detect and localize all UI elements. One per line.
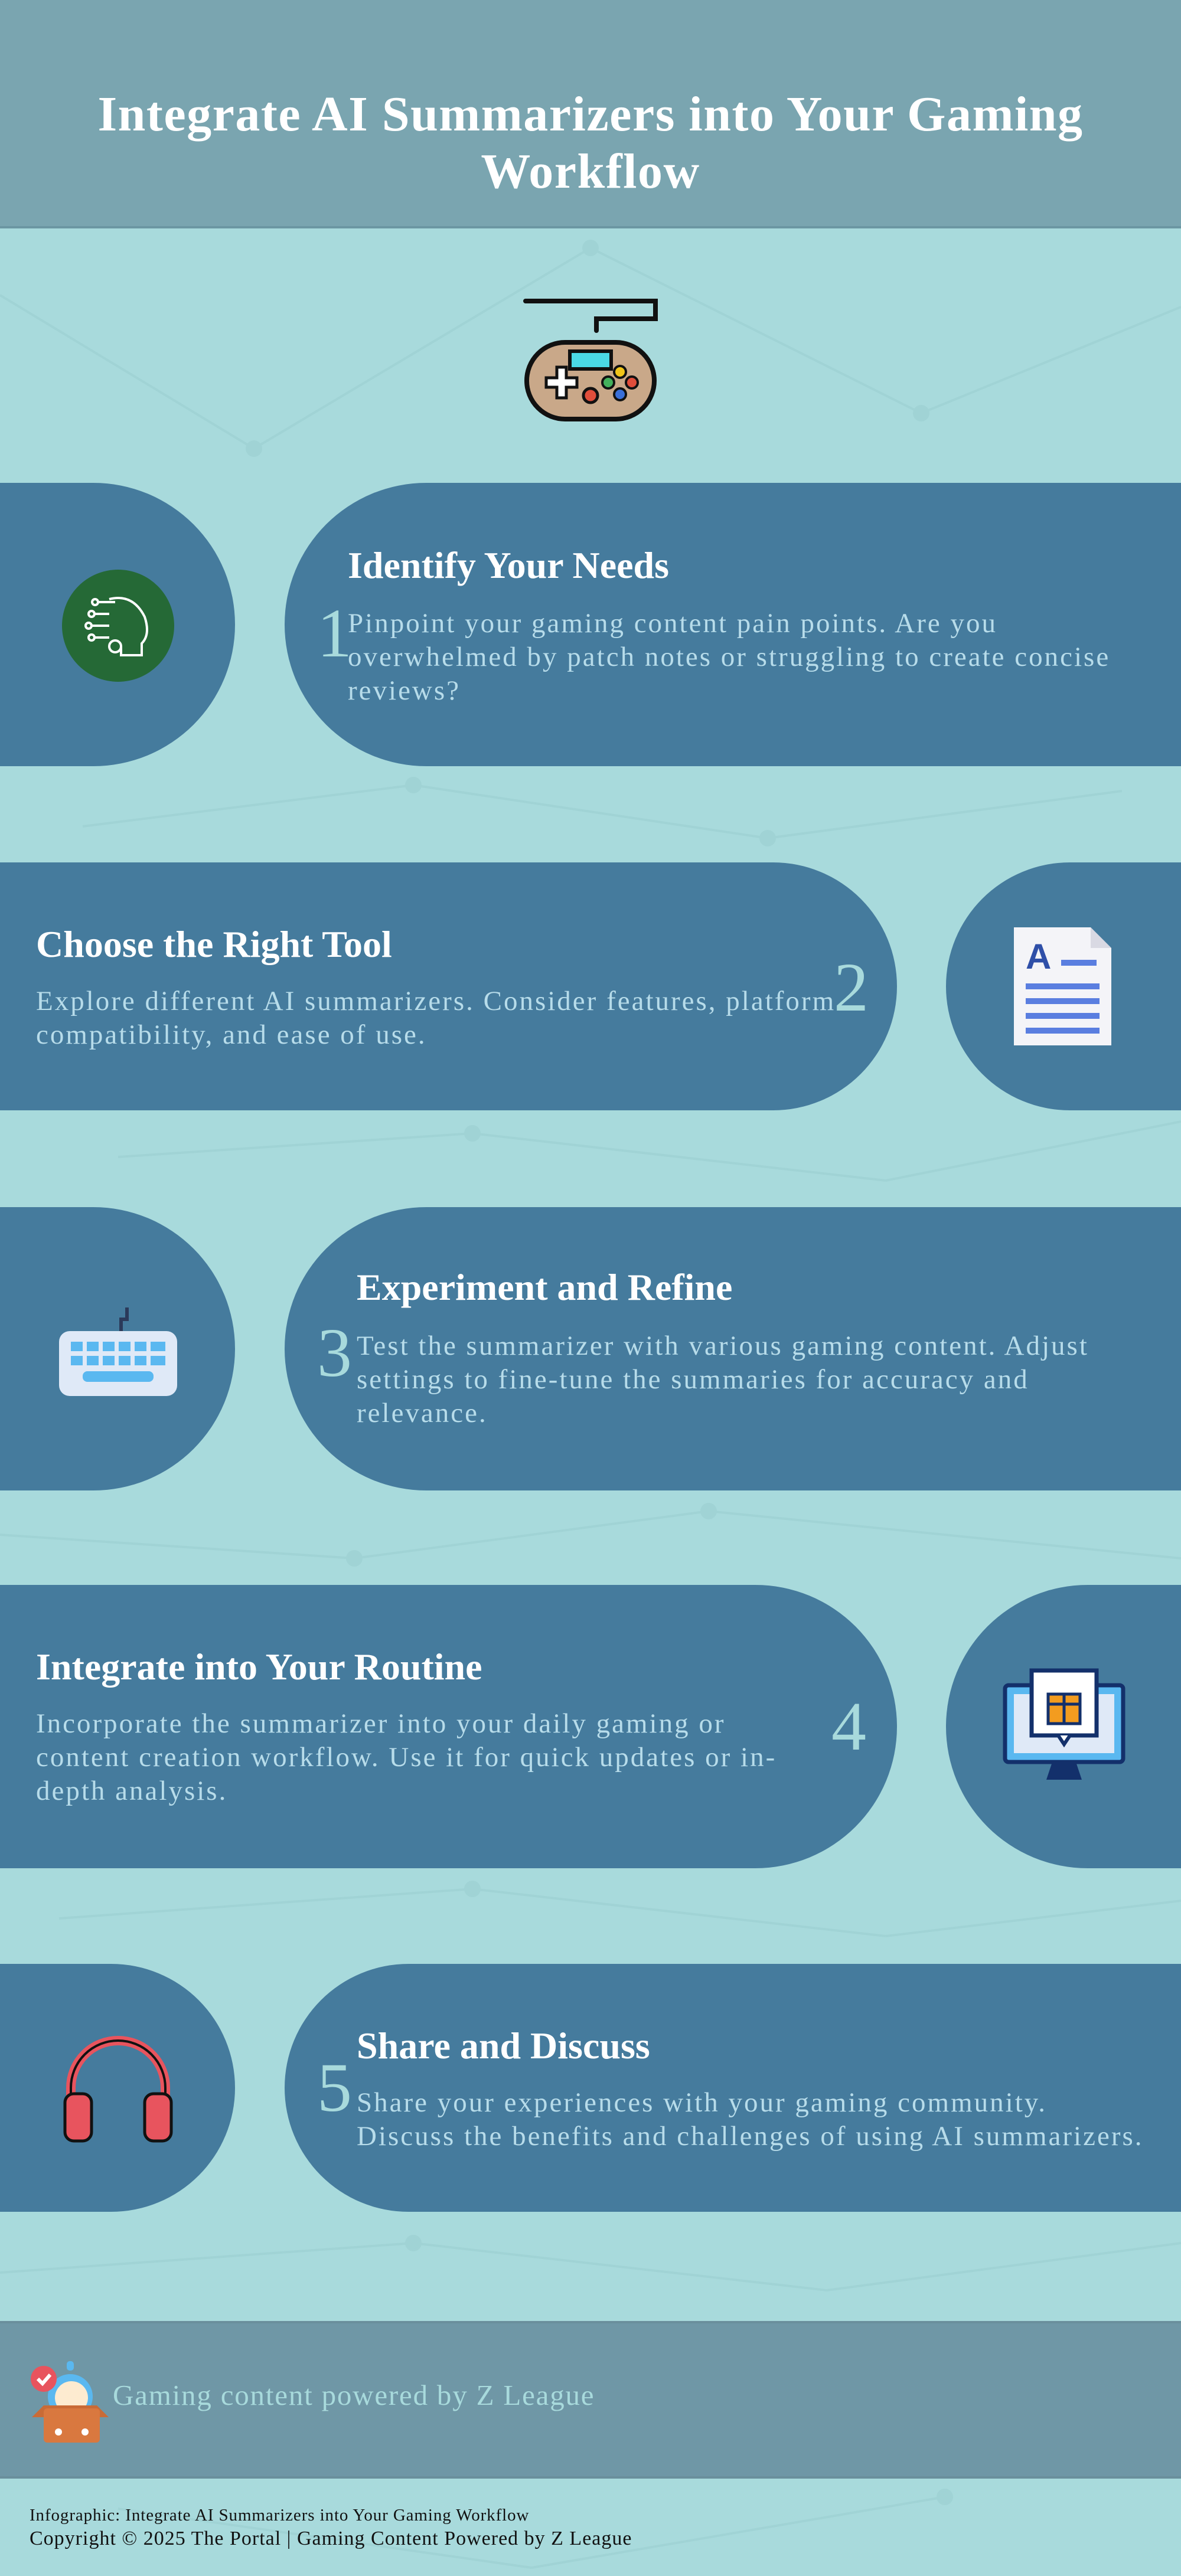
body: overwhelmed by patch notes or struggling to create concise (348, 642, 1110, 672)
content pill (285, 1207, 1181, 1490)
icon pill: keyboard (0, 1207, 235, 1490)
body: Explore different AI summarizers. Consider features, platform (36, 986, 836, 1016)
body: Share your experiences with your gaming community. (357, 2087, 1047, 2118)
body: Discuss the benefits and challenges of using AI summarizers. (357, 2121, 1144, 2152)
heading: Choose the Right Tool (36, 923, 392, 965)
icon: box with stopwatch (31, 2361, 109, 2443)
icon pill: headphones (0, 1964, 235, 2212)
body: compatibility, and ease of use. (36, 1019, 427, 1050)
body (357, 2087, 1144, 2152)
number 3: 3 (317, 1314, 352, 1391)
number 1: 1 (317, 594, 352, 672)
footer band (0, 2321, 1181, 2479)
step 3 (0, 1207, 1181, 1490)
credits (30, 2506, 632, 2549)
body: depth analysis. (36, 1776, 227, 1806)
body: settings to fine-tune the summaries for accuracy and (357, 1364, 1029, 1395)
body: reviews? (348, 675, 461, 706)
title (97, 87, 1084, 199)
body: relevance. (357, 1398, 488, 1428)
body (357, 1331, 1089, 1428)
icon pill: AI brain (0, 483, 235, 766)
content pill (0, 862, 897, 1110)
footer text: Gaming content powered by Z League (113, 2379, 595, 2411)
heading: Experiment and Refine (357, 1266, 732, 1308)
body (36, 986, 836, 1050)
number 5: 5 (317, 2049, 352, 2126)
number 2: 2 (834, 949, 869, 1026)
credits: Infographic: Integrate AI Summarizers into Your Gaming Workflow (30, 2506, 529, 2525)
number 4: 4 (831, 1688, 866, 1765)
body: content creation workflow. Use it for quick updates or in- (36, 1742, 777, 1773)
step 5 (0, 1964, 1181, 2212)
title: Integrate AI Summarizers into Your Gaming (97, 87, 1084, 142)
step 2 (0, 862, 1181, 1110)
content pill (285, 1964, 1181, 2212)
title: Workflow (481, 144, 700, 199)
body: Pinpoint your gaming content pain points. Are you (348, 608, 997, 639)
credits: Copyright © 2025 The Portal | Gaming Content Powered by Z League (30, 2528, 632, 2549)
heading: Identify Your Needs (348, 544, 669, 586)
icon pill: document (946, 862, 1181, 1110)
icon pill: document: A (1026, 937, 1051, 976)
body: Test the summarizer with various gaming content. Adjust (357, 1331, 1089, 1361)
step 1 (0, 483, 1181, 766)
body (348, 608, 1110, 706)
content pill (285, 483, 1181, 766)
header (0, 0, 1181, 228)
body (36, 1708, 777, 1806)
heading: Share and Discuss (357, 2025, 650, 2067)
body: Incorporate the summarizer into your daily gaming or (36, 1708, 725, 1739)
heading: Integrate into Your Routine (36, 1646, 482, 1688)
step 4 (0, 1585, 1181, 1868)
icon pill: monitor gift (946, 1585, 1181, 1868)
content pill (0, 1585, 897, 1868)
icon: gamepad (523, 299, 658, 421)
